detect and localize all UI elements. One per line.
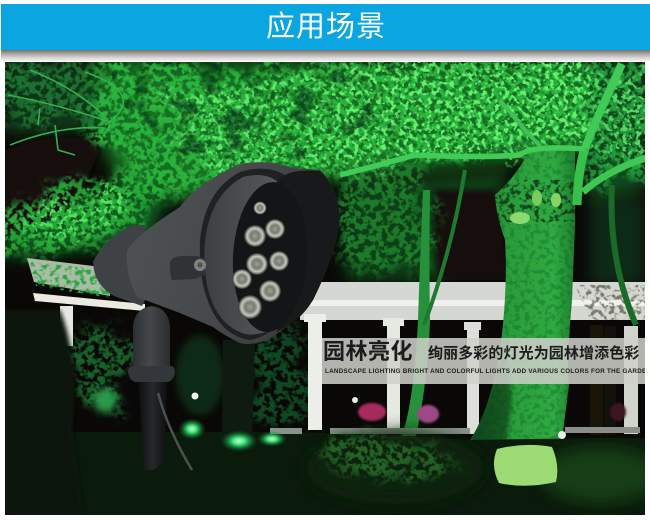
bare branches top left (8, 70, 123, 155)
LED lamps (232, 202, 289, 319)
caption heading: 园林亮化 (323, 339, 413, 364)
cable (158, 393, 192, 470)
mount dome and collar (133, 306, 170, 366)
header band (1, 4, 650, 50)
header shadow strip (1, 50, 650, 61)
caption text (323, 339, 645, 375)
sky gaps (5, 138, 505, 280)
canopy base colour (5, 62, 645, 285)
left shrub (5, 307, 76, 432)
spotlight fixture (93, 162, 340, 470)
lens plate (229, 180, 311, 334)
stone (494, 445, 557, 486)
distant flowers (358, 403, 626, 423)
pergola (27, 258, 645, 434)
dark gaps in canopy (110, 62, 400, 175)
caption English line: LANDSCAPE LIGHTING BRIGHT AND COLORFUL LIGHTS ADD VARIOUS COLORS FOR THE GARDEN (325, 368, 645, 375)
railing (270, 428, 470, 434)
main housing (127, 162, 340, 344)
bracket and bolt (170, 256, 206, 280)
lawn (72, 432, 645, 515)
highlight foliage (10, 50, 650, 245)
rear cap (93, 225, 150, 306)
ring groove (200, 169, 308, 340)
main tree trunk (340, 64, 646, 450)
foreground bush (307, 432, 483, 504)
ground lights (178, 392, 566, 452)
title: 应用场景 (266, 11, 386, 43)
hood interior (276, 170, 340, 332)
stake (138, 378, 167, 470)
mid-ground tree trunks (222, 170, 636, 445)
caption backdrop (322, 338, 645, 384)
mid-ground foliage (93, 335, 224, 415)
night background (5, 62, 645, 440)
pergola overgrowth (30, 262, 645, 320)
foliage layer (0, 50, 650, 420)
caption subheading: 绚丽多彩的灯光为园林增添色彩 (428, 345, 639, 362)
collar ring (204, 175, 290, 335)
